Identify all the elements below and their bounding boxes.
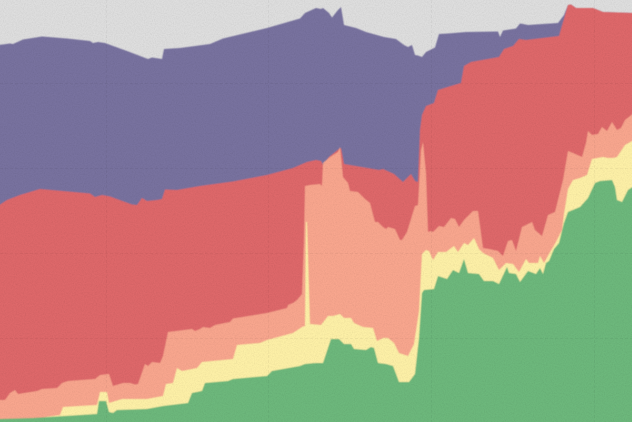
band: green [0, 180, 632, 422]
band: salmon [0, 113, 632, 422]
band: yellow [45, 140, 632, 422]
